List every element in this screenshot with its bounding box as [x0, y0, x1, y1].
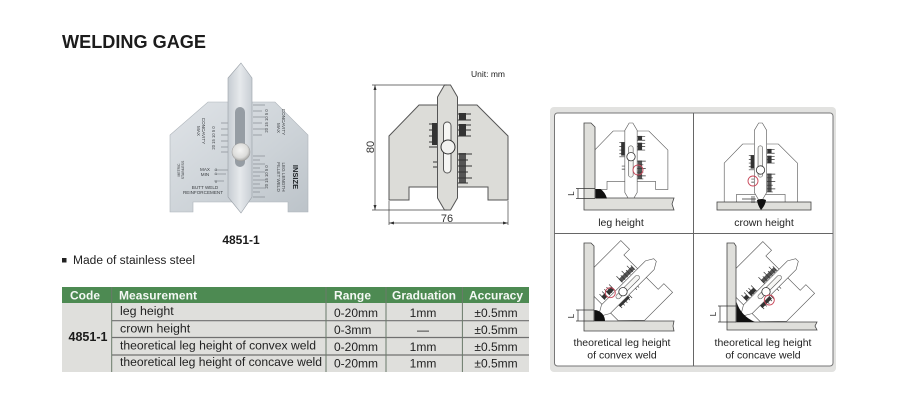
label: crown height	[734, 217, 794, 229]
engraved labels: METRIC	[177, 163, 181, 176]
label: of concave weld	[725, 350, 801, 362]
row: convex weld: theoretical leg height of convex weld	[120, 338, 316, 352]
row: concave weld: 0-20mm	[334, 356, 378, 370]
table background	[62, 303, 529, 372]
L dimension: L	[567, 191, 576, 196]
gage body plate	[170, 102, 308, 212]
product photo: welding gage	[170, 63, 308, 213]
knob	[232, 143, 250, 161]
row: convex weld: ±0.5mm	[474, 340, 518, 354]
engraved labels: 20 15 10 5 0	[264, 109, 269, 133]
red circle marker	[748, 176, 758, 186]
engraved labels: MAX	[276, 123, 281, 133]
dimension drawing	[365, 69, 508, 225]
row: leg height: leg height	[120, 304, 174, 318]
blade outline	[438, 85, 458, 210]
label: theoretical leg height	[715, 337, 812, 349]
row: leg height: ±0.5mm	[474, 306, 518, 320]
engraved labels: 20 15 10 5 0	[211, 126, 216, 150]
table header: Accuracy	[469, 288, 523, 302]
engraved labels: FILLET WELD	[276, 162, 281, 192]
engraved labels: REINFORCEMENT	[183, 190, 223, 195]
row: convex weld: 0-20mm	[334, 340, 378, 354]
blade slot	[235, 107, 245, 167]
diagram: leg height	[567, 123, 674, 229]
row: leg height	[120, 304, 518, 320]
specification table	[62, 287, 529, 372]
engraved labels: CONCAVITY	[281, 109, 286, 135]
table header: Measurement	[119, 288, 197, 302]
engraved labels: STAINLESS	[181, 160, 185, 179]
wall and base plate	[584, 123, 674, 210]
label	[574, 337, 671, 362]
feature bullet: Made of stainless steel	[73, 255, 195, 267]
red circle marker	[764, 295, 774, 305]
dimension 80: 80	[365, 141, 377, 153]
label: theoretical leg height	[574, 337, 671, 349]
diagram: concave weld	[709, 242, 817, 362]
knob outline	[441, 140, 455, 154]
label	[715, 337, 812, 362]
weld	[757, 199, 766, 210]
L dimension: L	[709, 311, 718, 316]
weld	[596, 189, 607, 198]
row: concave weld: theoretical leg height of concave weld	[120, 355, 322, 369]
logo: INSIZE	[291, 165, 300, 189]
code cell: 4851-1	[69, 330, 108, 344]
dimension 80	[365, 85, 447, 210]
dimension 76: 76	[441, 213, 453, 225]
engraved labels: MAX	[196, 126, 201, 136]
row: crown height: crown height	[120, 322, 191, 336]
engraved labels: 0	[215, 180, 217, 184]
table header	[62, 287, 529, 303]
engraved labels: 1	[215, 172, 217, 176]
diagram: convex weld	[567, 241, 674, 362]
wall and base plate	[727, 243, 817, 330]
scale ticks	[214, 105, 265, 197]
engraved labels: MAX	[200, 167, 210, 172]
panel: measurement usage diagrams	[550, 107, 836, 372]
L dimension	[742, 196, 756, 203]
engraved labels: 3	[215, 168, 217, 172]
row: crown height	[120, 322, 518, 337]
red circle marker	[633, 165, 643, 175]
table header: Range	[334, 288, 371, 302]
row: concave weld: 1mm	[410, 356, 436, 370]
label: of convex weld	[587, 350, 657, 362]
red circle marker	[605, 288, 615, 298]
table header: Code	[70, 288, 100, 302]
dimension 76	[389, 201, 508, 225]
weld	[736, 302, 755, 322]
title: WELDING GAGE	[62, 31, 206, 52]
engraved labels: MIN	[201, 172, 209, 177]
gage outline	[389, 105, 508, 200]
row: convex weld	[120, 338, 518, 354]
wall and base plate	[584, 243, 674, 331]
sliding blade	[228, 63, 252, 213]
row: crown height: ±0.5mm	[474, 323, 518, 337]
engraved labels: BUTT WELD	[192, 185, 219, 190]
label: leg height	[598, 217, 644, 229]
row: convex weld: 1mm	[410, 340, 436, 354]
row: crown height: 0-3mm	[334, 323, 371, 337]
model number: 4851-1	[222, 233, 260, 247]
row: concave weld	[120, 355, 518, 370]
weld	[594, 310, 605, 321]
table header: Graduation	[392, 288, 456, 302]
engraved labels: CONCAVITY	[201, 118, 206, 144]
row: crown height: —	[417, 323, 429, 337]
base plate	[717, 202, 811, 210]
panel frame	[550, 107, 836, 372]
row: leg height: 1mm	[410, 306, 436, 320]
L dimension: L	[567, 313, 576, 318]
engraved labels	[177, 109, 286, 195]
engraved labels: 20 15 10 5 0	[264, 165, 269, 189]
engraved labels: LEG LENGTH	[281, 162, 286, 192]
diagram: crown height	[717, 123, 811, 229]
unit note: Unit: mm	[471, 69, 505, 79]
row: concave weld: ±0.5mm	[474, 356, 518, 370]
row: leg height: 0-20mm	[334, 306, 378, 320]
